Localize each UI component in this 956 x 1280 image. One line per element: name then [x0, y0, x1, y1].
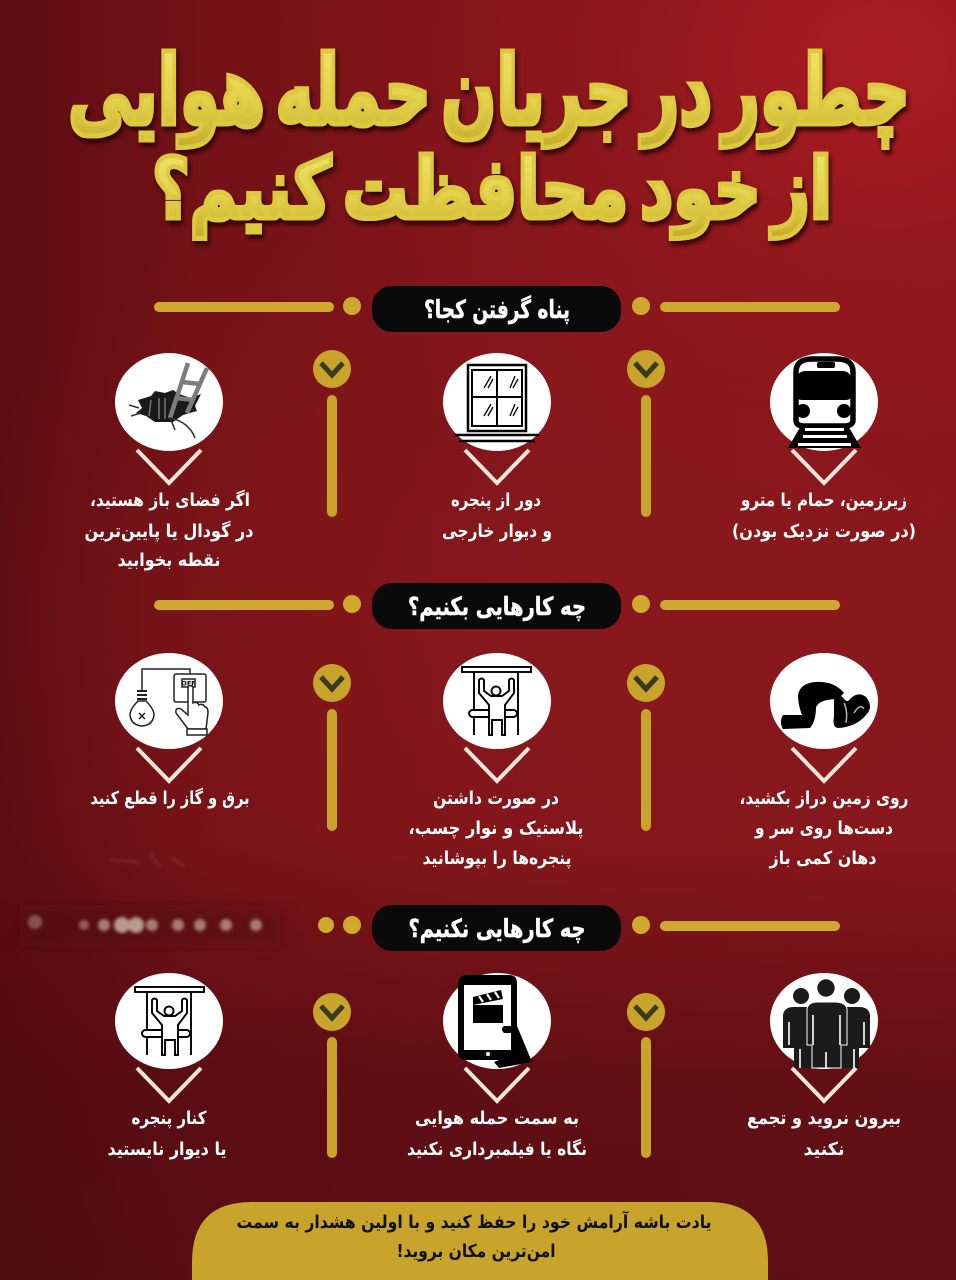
text: cover windows: پلاستیک و نوار چسب،	[408, 818, 584, 839]
text: lie on the ground: دهان کمی باز	[769, 848, 876, 869]
icon: pointer	[792, 1068, 856, 1101]
text: do not film: نگاه یا فیلمبرداری نکنید	[407, 1138, 587, 1160]
panel: open space	[84, 353, 254, 571]
panel: away from window	[442, 353, 552, 542]
text: subway: زیرزمین، حمام یا مترو	[740, 490, 907, 511]
icon: light switch and bulb: OFF	[181, 680, 196, 688]
arrow: row one right	[627, 350, 665, 517]
icon: pointer	[465, 748, 529, 781]
icon: prone person	[770, 653, 878, 749]
icon: pointer	[137, 1068, 201, 1101]
panel: do not go out	[747, 973, 901, 1160]
icon: pointer	[137, 450, 201, 483]
section heading: where to shelter	[154, 286, 840, 332]
icon: train	[770, 353, 878, 451]
icon: pointer	[465, 1068, 529, 1101]
panel: cut power and gas	[90, 653, 250, 809]
arrow: row three right	[627, 993, 665, 1158]
panel: do not stand by window	[108, 973, 226, 1160]
icon: person at window	[443, 653, 551, 749]
text: lie on the ground: دست‌ها روی سر و	[754, 818, 893, 839]
callout: stay calm	[192, 1202, 768, 1280]
section heading: where to shelter: پناه گرفتن کجا؟	[424, 295, 570, 325]
panel: cover windows	[408, 653, 584, 869]
text: cover windows	[408, 788, 584, 869]
panel: do not film	[407, 973, 587, 1160]
icon: group of people	[770, 973, 878, 1069]
callout: stay calm: یادت باشه آرامش خود را حفظ کنید و با اولین هشدار به سمت	[236, 1210, 712, 1233]
icon: person at window	[115, 973, 223, 1069]
arrow: row two left	[313, 664, 351, 831]
text: open space: نقطه بخوابید	[118, 550, 220, 571]
callout: stay calm: امن‌ترین مکان بروید!	[396, 1241, 556, 1262]
panel: subway, bathroom	[732, 353, 916, 542]
icon: pointer	[792, 450, 856, 483]
section heading: what to do	[154, 583, 840, 629]
text: open space: در گودال یا پایین‌ترین	[84, 520, 254, 542]
text: away from window: دور از پنجره	[451, 490, 541, 511]
text: do not stand by window	[108, 1108, 226, 1160]
text: subway	[732, 490, 916, 542]
section heading: what not to do: چه کارهایی نکنیم؟	[408, 914, 586, 943]
text: cover windows: پنجره‌ها را بپوشانید	[422, 848, 572, 869]
section heading: what not to do	[318, 905, 840, 951]
text: do not stand by window: کنار پنجره	[132, 1108, 207, 1129]
section heading: what to do: چه کارهایی بکنیم؟	[408, 592, 586, 621]
icon: hole with ladder	[115, 353, 223, 451]
text: cut power and gas: برق و گاز را قطع کنید	[90, 787, 250, 809]
icon: light switch and bulb	[115, 653, 223, 749]
text: do not go out: نکنید	[804, 1139, 844, 1160]
text: do not stand by window: یا دیوار نایستید	[108, 1139, 226, 1160]
text: subway: (در صورت نزدیک بودن)	[732, 521, 916, 542]
text: do not go out: بیرون نروید و تجمع	[747, 1108, 901, 1129]
icon: pointer	[137, 748, 201, 781]
text: open space	[84, 489, 254, 571]
panel: lie on the ground	[740, 653, 908, 869]
arrow: row one left	[313, 350, 351, 517]
text: open space: اگر فضای باز هستید،	[90, 489, 250, 511]
text: lie on the ground	[740, 788, 908, 869]
icon: phone filming	[443, 973, 551, 1069]
text: do not film	[407, 1108, 587, 1160]
icon: pointer	[792, 748, 856, 781]
text: lie on the ground: روی زمین دراز بکشید،	[740, 788, 908, 809]
text: do not go out	[747, 1108, 901, 1160]
blurred watermark	[20, 852, 280, 947]
icon: pointer	[465, 450, 529, 483]
arrow: row two right	[627, 664, 665, 831]
title	[68, 35, 910, 239]
text: away from window	[442, 490, 552, 542]
text: do not film: به سمت حمله هوایی	[415, 1108, 579, 1129]
text: cover windows: در صورت داشتن	[433, 788, 559, 809]
text: away from window: و دیوار خارجی	[442, 521, 552, 542]
arrow: row three left	[313, 993, 351, 1158]
icon: window	[443, 353, 551, 451]
